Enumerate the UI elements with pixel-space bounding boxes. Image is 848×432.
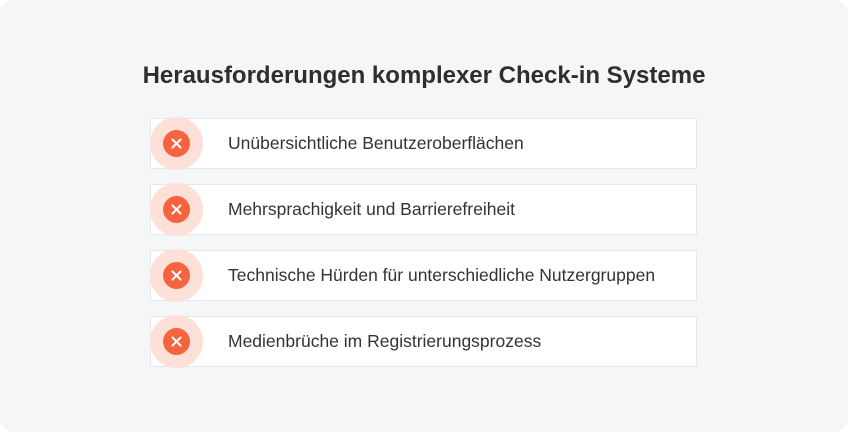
item: Medienbrüche: Medienbrüche im Registrierungsprozess bbox=[228, 331, 541, 351]
icon: x bbox=[150, 249, 203, 302]
item: Unübersichtliche Benutzeroberflächen bbox=[150, 117, 697, 170]
item: Technische Hürden: Technische Hürden für unterschiedliche Nutzergruppen bbox=[228, 265, 655, 285]
item: Mehrsprachigkeit: Mehrsprachigkeit und Barrierefreiheit bbox=[228, 199, 515, 219]
item: Unübersichtliche Benutzeroberflächen: Unübersichtliche Benutzeroberflächen bbox=[228, 133, 524, 153]
item: Mehrsprachigkeit bbox=[150, 183, 697, 236]
icon: x bbox=[150, 315, 203, 368]
item: Technische Hürden bbox=[150, 249, 697, 302]
icon: x bbox=[150, 183, 203, 236]
item: Medienbrüche bbox=[150, 315, 697, 368]
icon: x bbox=[150, 117, 203, 170]
title: Herausforderungen komplexer Check-in Systeme bbox=[143, 62, 705, 89]
